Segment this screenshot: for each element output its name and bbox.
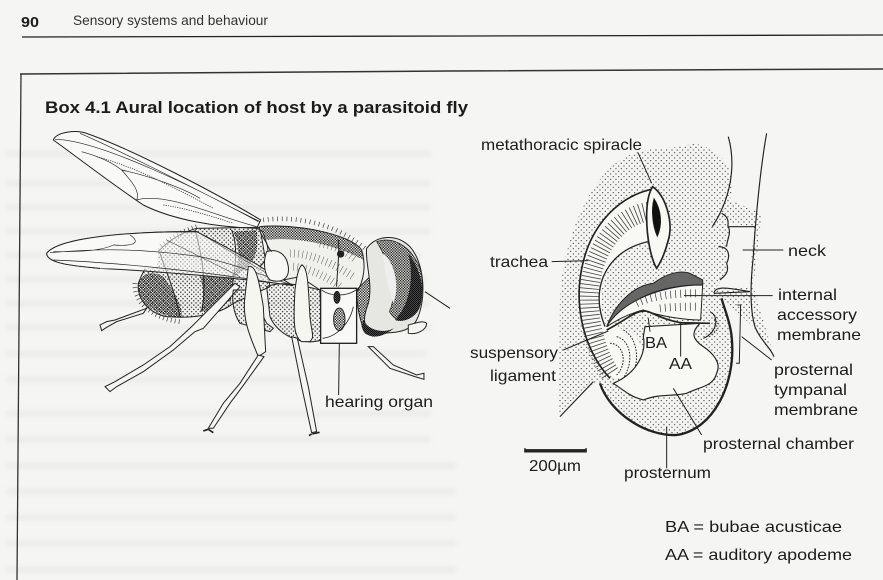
running header: chapter title: Sensory systems and behaviour — [73, 12, 268, 28]
text: membrane — [774, 402, 858, 419]
head — [357, 237, 450, 337]
abbreviation key: BA: BA = bubae acusticae — [665, 519, 842, 536]
text: tympanal — [774, 382, 847, 399]
label: prosternal tympanal membrane: prosternal — [774, 362, 853, 379]
upper wing — [53, 132, 261, 228]
hearing organ inset — [321, 288, 357, 343]
front leg — [294, 265, 313, 342]
text: membrane — [777, 327, 861, 344]
lower body — [267, 284, 322, 342]
heading: Box 4.1 Aural location of host by a parasitoid fly — [45, 98, 469, 117]
bracket — [736, 305, 741, 363]
abbreviation key: AA: AA = auditory apodeme — [665, 547, 852, 564]
hind leg — [100, 308, 147, 331]
abdomen — [138, 227, 270, 317]
fly illustration — [47, 132, 450, 436]
prosternal bowl — [600, 298, 732, 435]
stippled tissue — [559, 137, 775, 435]
label: BA: BA — [645, 335, 667, 352]
label: AA: AA — [669, 356, 692, 373]
suspensory ligament and apodeme — [607, 311, 710, 330]
thorax — [260, 226, 364, 290]
label: internal accessory membrane: internal — [778, 287, 837, 304]
spiracle — [647, 187, 670, 268]
label: prosternum: prosternum — [624, 465, 711, 482]
text: ligament — [490, 368, 557, 385]
accessory membrane — [607, 272, 703, 327]
head leg — [368, 347, 424, 379]
running header: page number: 90 — [21, 14, 39, 31]
prosternum diagram — [525, 133, 783, 468]
label: trachea: trachea — [490, 254, 548, 271]
neck outline — [560, 133, 774, 417]
scale bar — [525, 448, 586, 452]
text: accessory — [777, 307, 857, 324]
mid-hind leg — [105, 283, 240, 392]
mid leg — [233, 290, 273, 332]
lower wing — [47, 232, 293, 286]
label: metathoracic spiracle: metathoracic spiracle — [481, 137, 642, 154]
chamber — [613, 323, 718, 400]
hearing organ leader — [337, 344, 341, 395]
trachea — [579, 189, 657, 380]
label: hearing organ: hearing organ — [325, 394, 433, 411]
label: prosternal chamber: prosternal chamber — [703, 436, 855, 453]
label: suspensory ligament: suspensory — [470, 345, 558, 362]
leader lines — [552, 153, 783, 468]
label: neck: neck — [788, 243, 827, 260]
label: scale 200µm: 200µm — [529, 458, 581, 475]
